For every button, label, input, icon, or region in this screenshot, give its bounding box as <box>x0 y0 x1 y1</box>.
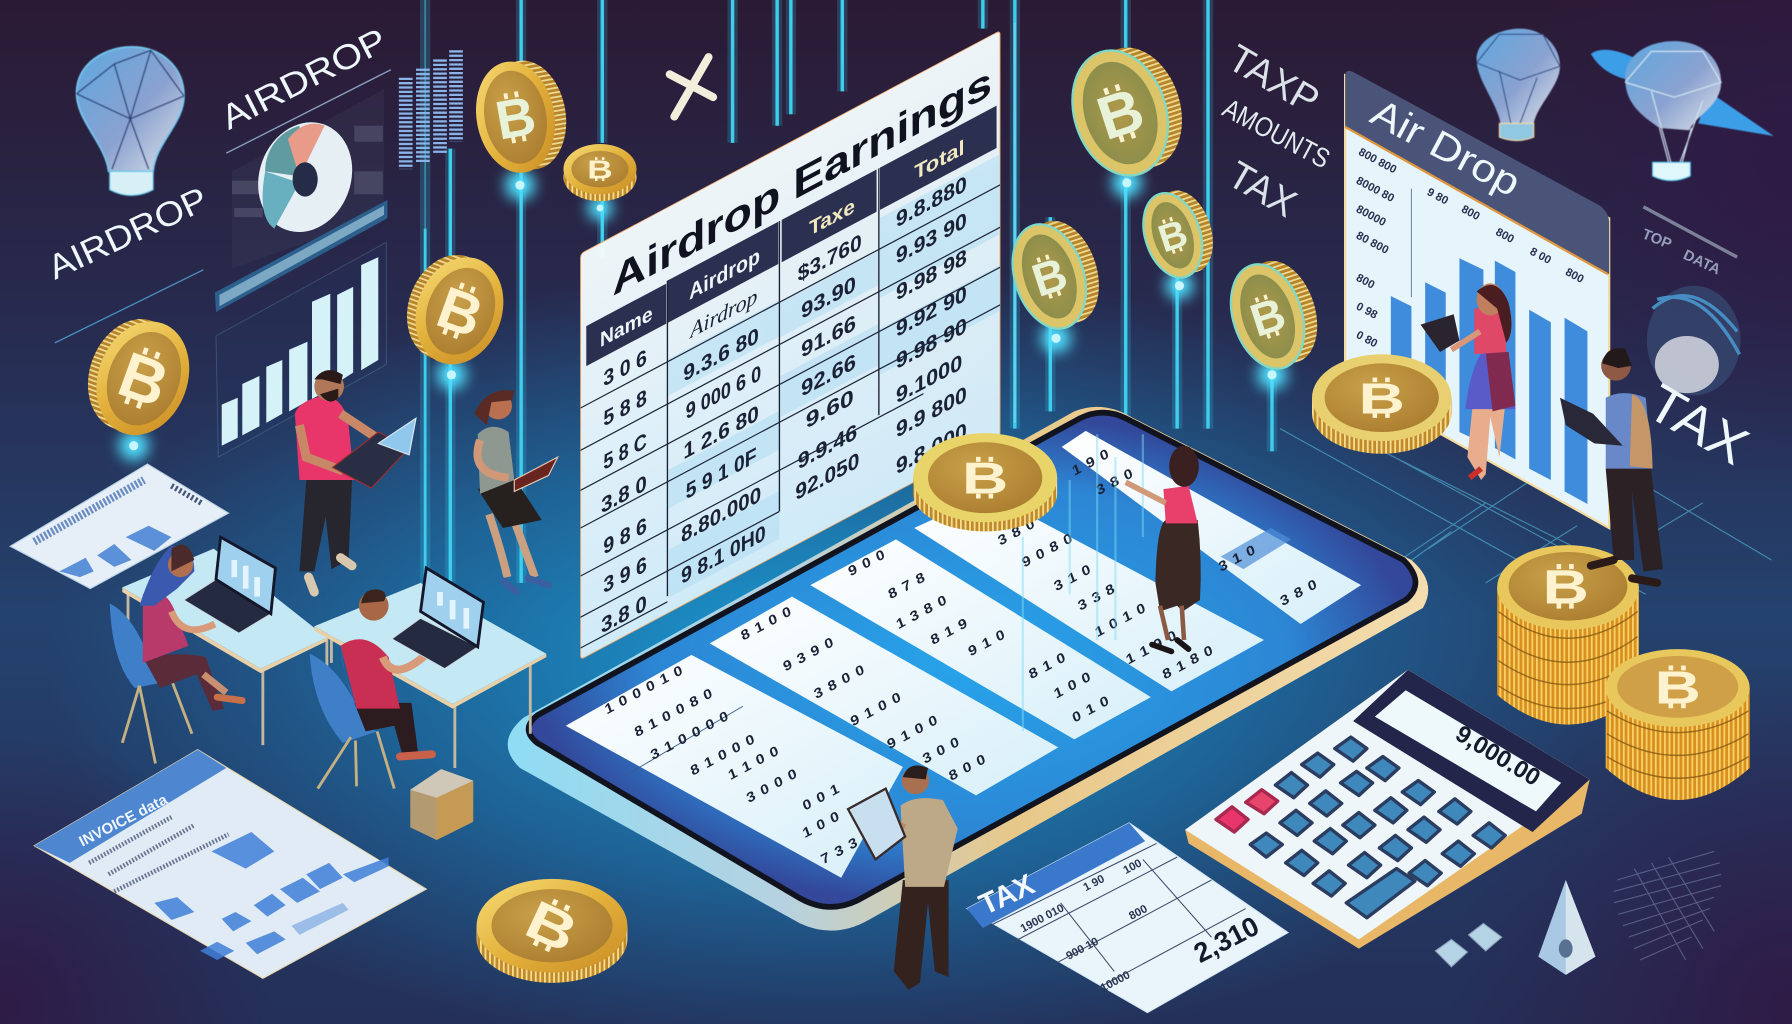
panel bars <box>1391 258 1587 504</box>
table header: Total <box>914 135 965 185</box>
person standing with laptop <box>295 370 416 592</box>
tax amount: 2,310 <box>1189 910 1264 969</box>
coin: top left <box>467 53 575 179</box>
table column: total: 9.98 90 <box>896 312 967 374</box>
paper strip A: 7 3 3 <box>819 835 861 868</box>
label: TAX right: TAX <box>1637 373 1758 477</box>
small labels: 800 <box>1563 266 1586 286</box>
table column: name: 3 9 6 <box>603 551 647 598</box>
paper strip E <box>1062 431 1361 624</box>
paper strip B: 3 0 0 <box>921 734 962 767</box>
paper strip A: 1 0 0 <box>801 809 842 842</box>
paper strip C <box>810 539 1151 739</box>
table column: name: 3 0 6 <box>603 344 647 391</box>
paper strip B: 3 8 0 0 <box>812 662 867 703</box>
coin stack 1 <box>1497 545 1639 725</box>
label: TAXP: TAXP <box>1221 37 1326 123</box>
decorative right panel <box>1640 207 1741 395</box>
table column: total: 9.8 000 <box>896 417 967 479</box>
person standing at chart <box>1421 283 1515 480</box>
floor grid <box>1280 429 1771 606</box>
table column: name: 5 8 8 <box>603 384 647 431</box>
small labels: 0 80 <box>1354 329 1379 350</box>
small labels: 80 800 <box>1354 230 1390 257</box>
small labels: 9 80 <box>1425 186 1450 207</box>
coin: top left: B <box>491 85 540 152</box>
coin: floating over phone <box>913 433 1057 531</box>
paper strip C: 8 1 0 <box>1027 650 1069 683</box>
small labels <box>1354 146 1586 350</box>
coin: middle right <box>1133 182 1223 285</box>
small keys <box>1435 923 1502 967</box>
table header: Taxe <box>809 193 855 241</box>
paper strip B <box>710 597 1058 795</box>
small labels: 80000 <box>1354 203 1388 229</box>
small labels: 8 00 <box>1528 246 1553 267</box>
balloon icon right <box>1477 29 1560 141</box>
table column: total: 9.9 800 <box>896 381 967 443</box>
tax form: 900 10 <box>1064 936 1101 963</box>
sketch texture <box>1614 851 1721 960</box>
coin stack 1: B <box>1543 560 1589 614</box>
coin: by table: B <box>1026 247 1073 307</box>
man's laptop <box>333 432 409 488</box>
coin: large flat right <box>1312 354 1451 454</box>
tax form: 10000 <box>1099 969 1132 995</box>
small labels: 800 800 <box>1356 146 1398 176</box>
table column: taxes <box>795 229 862 505</box>
decorative right panel: DATA <box>1681 247 1723 279</box>
table column: airdrop: 5 9 1 0F <box>686 442 757 504</box>
paper strip A: 3 0 0 0 <box>745 766 800 807</box>
small labels: 800 <box>1493 226 1516 246</box>
pie chart panel <box>232 89 384 269</box>
paper strip E: 3 8 0 <box>1279 577 1320 610</box>
coin: middle right: B <box>1153 212 1193 261</box>
paper strip A: 3 1 0 0 0 0 <box>649 708 732 764</box>
small labels: 800 <box>1354 272 1376 292</box>
X mark <box>670 57 713 117</box>
document lower left: INVOICE data <box>76 791 171 850</box>
table column: airdrop: Airdrop <box>688 284 757 345</box>
person leaning with book <box>474 390 558 592</box>
label: TAX upper: TAX <box>1221 153 1304 226</box>
label: AMOUNTS: AMOUNTS <box>1218 92 1335 174</box>
tax form: TAX <box>974 868 1040 922</box>
banner strip <box>215 200 387 312</box>
man's tablet <box>1560 398 1623 446</box>
paper strip E: 1 9 0 <box>1071 446 1112 479</box>
paper strip C: 8 7 8 <box>887 570 928 603</box>
woman's tablet <box>1421 314 1459 352</box>
person seated right <box>310 589 432 789</box>
paper strip A: 8 1 0 0 0 <box>689 731 758 779</box>
tax form: 800 <box>1127 903 1150 923</box>
table column: name: 3.8 0 <box>601 470 647 518</box>
decorative right panel: TOP <box>1640 227 1674 253</box>
table column: taxes: 92.050 <box>795 447 859 505</box>
winged balloon icon <box>1591 41 1774 181</box>
paper strip D: 3 3 8 <box>1076 581 1118 614</box>
paper strip A: 1 0 0 0 1 0 <box>603 663 686 718</box>
desk 1 <box>122 549 327 745</box>
table column: airdrop: 1 2.6 80 <box>683 400 759 464</box>
paper strip D: 3 1 0 <box>1052 562 1094 595</box>
paper strip A: 0 0 1 <box>801 781 842 814</box>
document upper left <box>10 464 229 589</box>
table column: name <box>601 344 647 638</box>
tax form <box>967 823 1288 1013</box>
table column: airdrop: 8.80.000 <box>681 481 761 548</box>
calculator keys <box>1216 737 1505 918</box>
person seated left <box>110 545 242 763</box>
paper strip E: 3 8 0 <box>1095 466 1136 499</box>
cone marker <box>1538 880 1595 975</box>
paper strip D: 1 0 1 0 <box>1093 600 1149 641</box>
paper strip D: 9 0 8 0 <box>1020 531 1075 571</box>
paper strip C: 9 1 0 <box>967 627 1008 660</box>
document lower left <box>34 750 426 978</box>
balloon icon left <box>77 47 184 195</box>
coin: centre left <box>392 242 518 377</box>
paper strip C: 8 1 9 <box>929 615 970 649</box>
coin: large flat right: B <box>1359 373 1405 423</box>
table column: name: 5 8 C <box>603 427 647 475</box>
table column: airdrop <box>681 279 766 589</box>
handheld tablet <box>848 789 905 859</box>
table header: Name <box>600 301 653 352</box>
coin: left <box>72 305 205 448</box>
desk 2 <box>314 583 546 768</box>
laptop on desk 2 <box>392 568 483 669</box>
table column: total: 9.98 98 <box>896 243 967 306</box>
coin: centre left: B <box>429 275 491 350</box>
paper strip D <box>914 494 1264 691</box>
table column: total: 9.93 90 <box>896 207 967 269</box>
paper strip C: 1 3 8 0 <box>895 592 950 633</box>
paper strip A: 8 1 0 0 8 0 <box>633 686 716 741</box>
coin: small flat <box>563 144 637 201</box>
paper strip D: 1 1 9 0 <box>1124 628 1179 668</box>
panel title: Air Drop <box>1364 91 1527 205</box>
paper strip A: 1 1 0 0 <box>727 743 782 784</box>
tax form: 1 90 <box>1081 873 1107 894</box>
table column: total <box>896 170 967 479</box>
table header <box>586 106 997 366</box>
book <box>514 457 558 491</box>
table column: taxes: 9.9.46 <box>798 418 857 474</box>
coin: left: B <box>110 338 178 421</box>
bar chart <box>216 242 386 457</box>
coin: floating over phone: B <box>962 453 1008 503</box>
panel: Air Drop report <box>1345 71 1609 528</box>
paper strip A <box>566 655 903 878</box>
paper strip B: 8 0 0 <box>947 751 989 785</box>
table column: taxes: 92.66 <box>801 348 856 402</box>
small labels: 0 98 <box>1354 301 1379 322</box>
table column: total: 9.1000 <box>896 349 962 408</box>
paper strip D: 8 1 8 0 <box>1161 643 1216 683</box>
paper strip C: 1 0 0 <box>1052 669 1094 702</box>
light beams <box>425 0 1272 623</box>
label: AIRDROP lower: AIRDROP <box>42 180 214 287</box>
coin: small flat: B <box>587 155 613 184</box>
person in front of phone <box>848 765 958 990</box>
coin: top right <box>1057 33 1198 188</box>
tax form: 1900 010 <box>1019 902 1066 935</box>
laptop on desk 1 <box>184 537 275 633</box>
paper strip E: 3 1 0 <box>1217 542 1258 575</box>
coin stack 2: B <box>1655 662 1701 713</box>
paper strip C: 0 1 0 <box>1071 693 1112 726</box>
person right of chart <box>1560 348 1663 583</box>
table column: taxes: 91.66 <box>801 309 856 363</box>
small labels: 800 <box>1459 203 1482 223</box>
phone <box>508 407 1428 931</box>
beams over table <box>1015 23 1143 731</box>
calculator screen <box>1353 670 1590 832</box>
table column: name: 9 8 6 <box>603 512 647 559</box>
table column: taxes: 9.60 <box>806 384 854 434</box>
table title: Airdrop Earnings <box>613 56 992 305</box>
label: AIRDROP lower <box>42 180 214 343</box>
coin: top right: B <box>1089 75 1152 153</box>
person on tablet with panel <box>1126 446 1201 651</box>
coin stack 2 <box>1606 649 1750 800</box>
main table panel <box>581 31 1000 659</box>
paper strip B: 9 3 9 0 <box>781 635 837 675</box>
coins: upper right cluster <box>1000 33 1330 378</box>
table rules <box>581 104 1000 648</box>
table column: taxes: 93.90 <box>801 270 856 324</box>
box <box>410 769 473 840</box>
calculator screen: 9,000.00 <box>1451 720 1545 792</box>
paper strip B: 8 1 0 0 <box>739 604 794 644</box>
table column: taxes: $3.760 <box>798 229 862 287</box>
calculator <box>1185 670 1590 949</box>
table column: name: 3.8 0 <box>601 590 647 638</box>
table header: Airdrop <box>689 243 760 305</box>
blue row tints <box>669 154 1000 598</box>
table column: airdrop: 9.3.6 80 <box>683 322 759 387</box>
paper strip B: 9 1 0 0 <box>885 712 941 753</box>
coin: floor: B <box>517 889 586 964</box>
paper strip C: 9 0 0 <box>847 547 888 580</box>
glow nodes <box>119 168 1287 461</box>
label: AIRDROP upper <box>215 22 393 153</box>
table column: airdrop: 9 000 6 0 <box>686 360 761 424</box>
paper strip D: 3 8 0 <box>996 516 1038 549</box>
coin: lower right: B <box>1244 287 1292 347</box>
paper strip B: 9 1 0 0 <box>849 689 904 730</box>
tax form: 100 <box>1121 857 1144 877</box>
coin: by table <box>1000 211 1112 338</box>
table column: total: 9.8.880 <box>896 170 967 232</box>
table column: total: 9.92 90 <box>896 280 967 342</box>
label: AIRDROP upper: AIRDROP <box>215 22 393 137</box>
small labels: 8000 80 <box>1354 175 1396 205</box>
table column: airdrop: 9 8.1 0H0 <box>681 520 766 589</box>
data grid pattern <box>406 50 456 169</box>
coin: floor <box>477 879 627 983</box>
coin: lower right <box>1218 251 1330 378</box>
